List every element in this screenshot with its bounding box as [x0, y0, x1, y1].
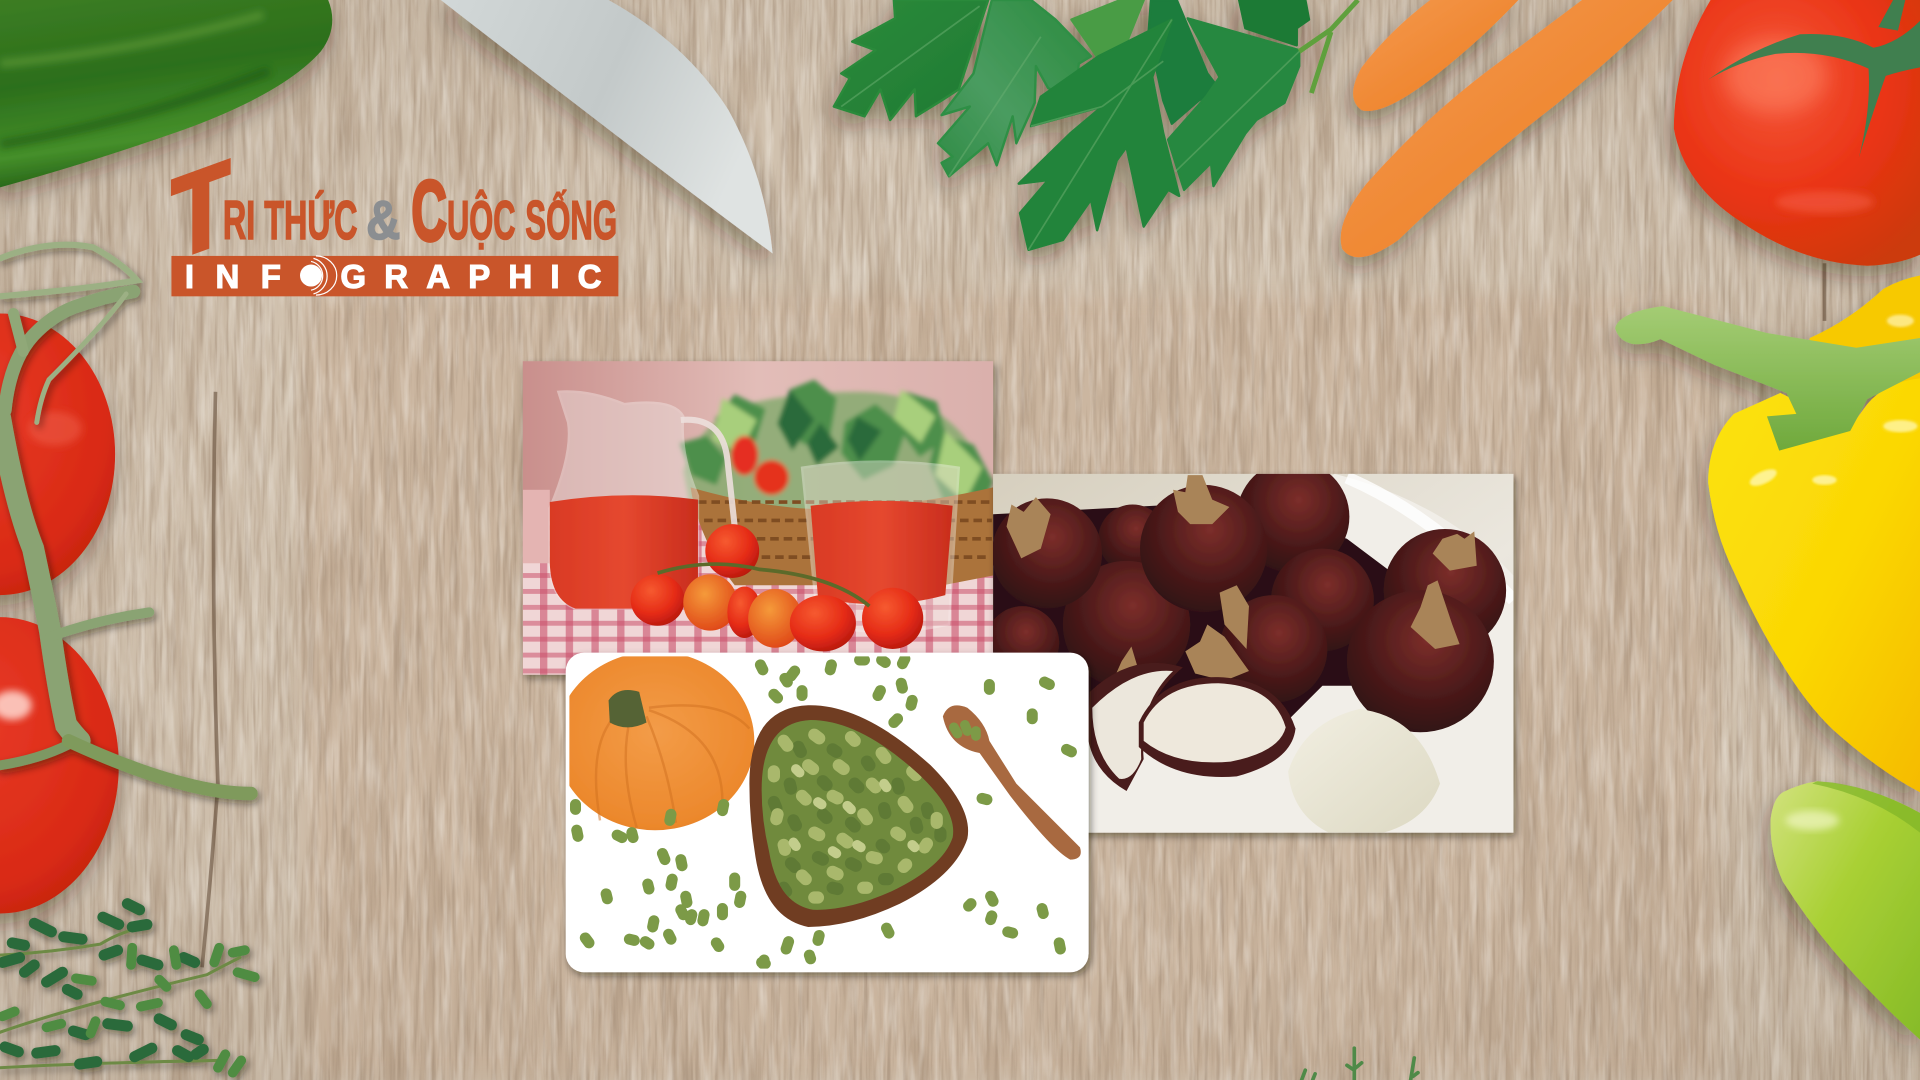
parsley stem	[1299, 0, 1358, 93]
yellow bell pepper	[1615, 276, 1920, 792]
leaf: back top	[1239, 0, 1309, 45]
leaf: front large	[1019, 20, 1179, 250]
peeled chestnut	[1288, 709, 1440, 833]
logo wordmark: SỐNG	[525, 189, 617, 251]
logo wordmark	[171, 135, 617, 286]
tomato left upper	[0, 313, 115, 595]
scattered pumpkin seeds	[576, 659, 1071, 964]
parsley leaves	[834, 0, 1358, 250]
pitcher	[550, 391, 698, 609]
logo orange banner	[171, 256, 618, 296]
glass	[802, 462, 959, 632]
tomato vine	[0, 245, 251, 793]
logo target icon	[300, 256, 337, 295]
logo wordmark: &	[366, 189, 400, 251]
carrots	[1341, 0, 1673, 257]
photo: tomato juice	[523, 361, 993, 675]
green pepper	[1771, 781, 1920, 1040]
thyme herb sprigs	[0, 904, 255, 1073]
cucumber	[0, 0, 332, 187]
logo wordmark: RI THỨC	[223, 189, 358, 251]
tomato top right	[1674, 0, 1920, 266]
logo wordmark: C	[411, 163, 447, 259]
basket	[691, 487, 993, 585]
bowl seeds	[774, 735, 940, 898]
white plate	[1078, 474, 1513, 833]
tomato left lower	[0, 617, 119, 913]
pile shadow	[993, 506, 1388, 718]
chestnut crowns	[1007, 475, 1477, 688]
carrot: upper	[1353, 0, 1518, 111]
tablecloth	[523, 520, 993, 675]
leaf: back middle	[1071, 0, 1144, 59]
wooden bowl	[749, 705, 968, 927]
knife blade	[441, 0, 773, 253]
carrot: lower	[1341, 0, 1673, 257]
cut chestnut halves	[1087, 663, 1183, 791]
leaf: far left	[834, 0, 988, 120]
wooden spoon	[943, 705, 1081, 860]
photo: pumpkin seeds card	[556, 651, 1089, 972]
logo wordmark: T	[171, 135, 230, 286]
pepper stem	[1615, 306, 1920, 451]
chestnuts pile	[1098, 504, 1152, 563]
blurred greenery	[680, 380, 993, 514]
logo infographic label: GRAPHIC	[340, 259, 620, 296]
bottom herb tips	[1302, 1048, 1418, 1080]
photo: water chestnuts	[986, 460, 1513, 833]
leaf: centre upper	[938, 0, 1091, 176]
logo wordmark: UỘC	[447, 189, 516, 251]
tomato calyx	[1708, 0, 1920, 158]
pumpkin	[556, 651, 754, 830]
leaf: right upper	[1149, 0, 1220, 124]
leaf: right	[1168, 18, 1299, 190]
logo infographic label: INF	[185, 259, 302, 296]
cherry tomatoes	[705, 524, 759, 578]
logo: Tri thức & Cuộc sống Infographic	[171, 135, 620, 296]
